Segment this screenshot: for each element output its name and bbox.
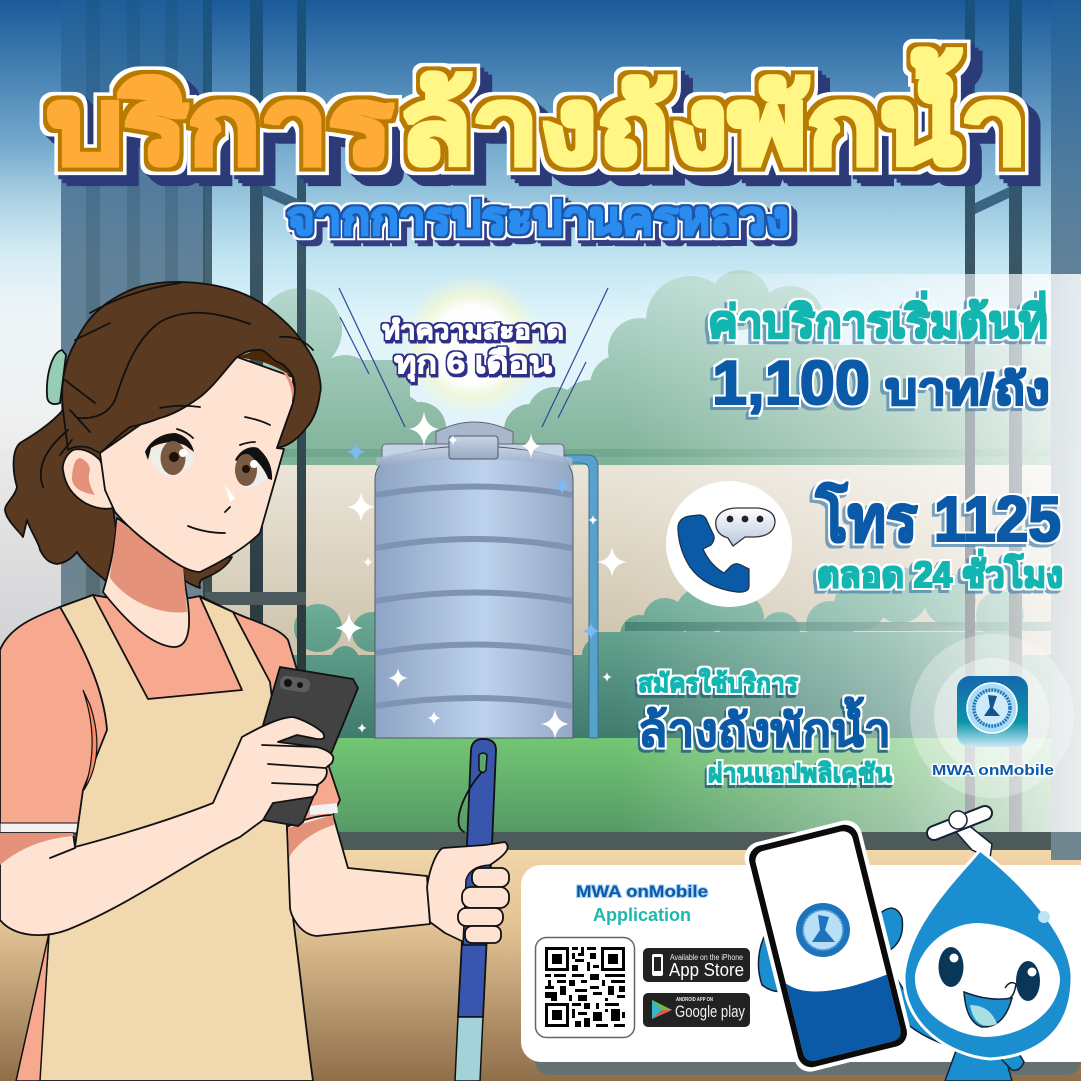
app signup block: ล้างถังพักน้ำ (638, 696, 891, 756)
clean rays (339, 288, 608, 427)
badge: Google play (643, 993, 750, 1027)
title (47, 48, 1028, 186)
panel: app download card: Application (593, 905, 691, 925)
water tank (375, 422, 598, 738)
hotline block: โทร 1125 (815, 481, 1061, 555)
badge: App Store (643, 948, 750, 982)
app signup block: ผ่านแอปพลิเคชัน (708, 758, 892, 788)
badge: Google play: ANDROID APP ON (676, 997, 713, 1003)
translucent right panel (620, 274, 1081, 832)
price block: 1,100 (712, 349, 870, 418)
price block: บาท/ถัง (885, 365, 1050, 414)
panel: app download card: MWA onMobile (576, 882, 708, 901)
subtitle: จากการประปานครหลวง (287, 192, 789, 244)
sparkles (335, 411, 627, 739)
phone held by mascot (741, 817, 915, 1075)
caption: clean every 6 months: ทุก 6 เดือน (394, 347, 553, 382)
woman character (0, 282, 509, 1081)
price block: ค่าบริการเริ่มต้นที่ (708, 291, 1048, 347)
icon: phone with speech bubble (666, 481, 792, 607)
caption: clean every 6 months (382, 315, 564, 382)
badge: App Store: App Store (669, 960, 744, 980)
app icon: MWA onMobile: MWA onMobile (932, 762, 1054, 779)
caption: clean every 6 months: ทำความสะอาด (382, 315, 564, 345)
badge: App Store: Available on the iPhone (670, 953, 743, 962)
window frame columns (0, 0, 1081, 860)
mascot: water drop (758, 811, 1072, 1081)
QR code (536, 938, 634, 1038)
title: บริการ (47, 68, 393, 186)
hotline block: ตลอด 24 ชั่วโมง (817, 549, 1063, 595)
title: ล้างถังพักน้ำ (399, 48, 1028, 186)
hotline block (815, 481, 1063, 595)
badge: Google play: Google play (675, 1002, 745, 1021)
app icon: MWA onMobile (910, 634, 1074, 798)
price block (708, 291, 1050, 418)
panel: app download card (521, 865, 1081, 1075)
app signup block (638, 668, 892, 788)
app signup block: สมัครใช้บริการ (638, 668, 798, 698)
